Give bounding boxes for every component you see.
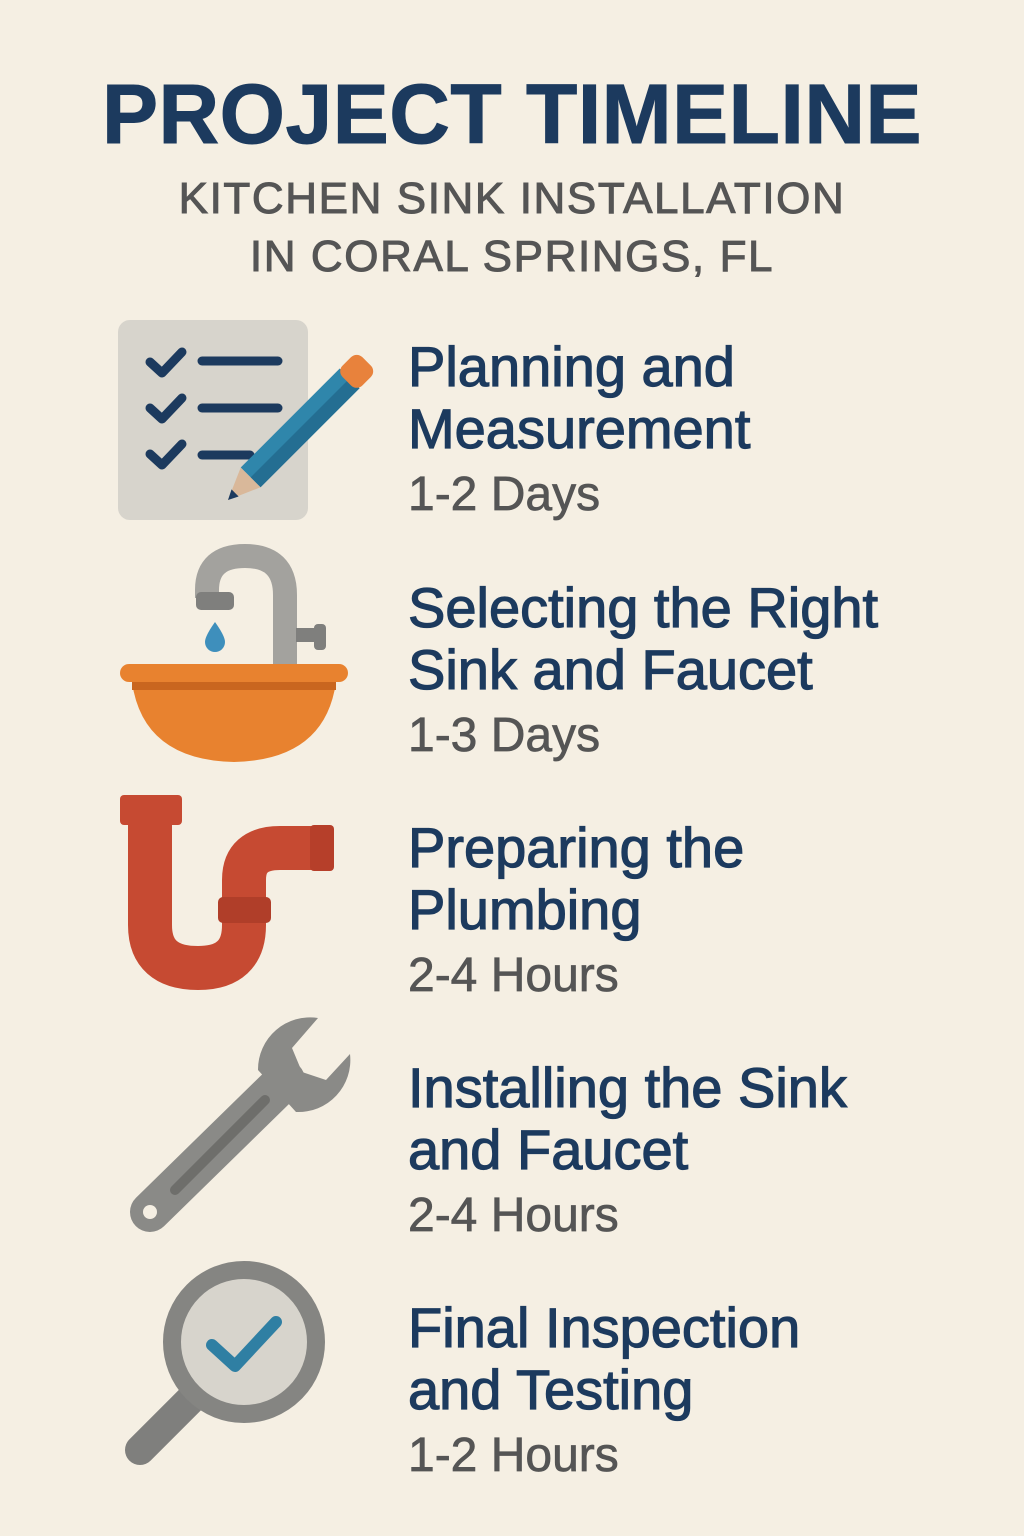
step 5 text: Final Inspection (408, 1296, 800, 1359)
step 1 text (408, 335, 751, 521)
icon: sink and faucet (120, 556, 348, 762)
subtitle (179, 174, 845, 281)
step 1 text: 1-2 Days (408, 468, 600, 521)
step 3 text: 2-4 Hours (408, 949, 619, 1002)
icon: p-trap pipe (120, 795, 334, 968)
step 3 text: Plumbing (408, 878, 641, 941)
step 4 text: and Faucet (408, 1118, 688, 1181)
step 2 text (408, 576, 878, 762)
step 3 text (408, 816, 744, 1002)
step 5 text: and Testing (408, 1358, 693, 1421)
icon: checklist with pencil (118, 320, 376, 520)
subtitle: KITCHEN SINK INSTALLATION (179, 174, 845, 223)
step 1 text: Planning and (408, 335, 735, 398)
subtitle: IN CORAL SPRINGS, FL (250, 232, 774, 281)
step 3 text: Preparing the (408, 816, 744, 879)
step 2 text: Selecting the Right (408, 576, 878, 639)
step 1 text: Measurement (408, 397, 750, 460)
icon: wrench (143, 1017, 350, 1219)
step 5 text (408, 1296, 800, 1482)
step 2 text: Sink and Faucet (408, 638, 813, 701)
step 4 text: 2-4 Hours (408, 1189, 619, 1242)
step 5 text: 1-2 Hours (408, 1429, 619, 1482)
title: PROJECT TIMELINE (102, 67, 922, 161)
step 2 text: 1-3 Days (408, 709, 600, 762)
step 4 text (408, 1056, 848, 1242)
step 4 text: Installing the Sink (408, 1056, 847, 1119)
icon: magnifier with check (140, 1270, 316, 1450)
